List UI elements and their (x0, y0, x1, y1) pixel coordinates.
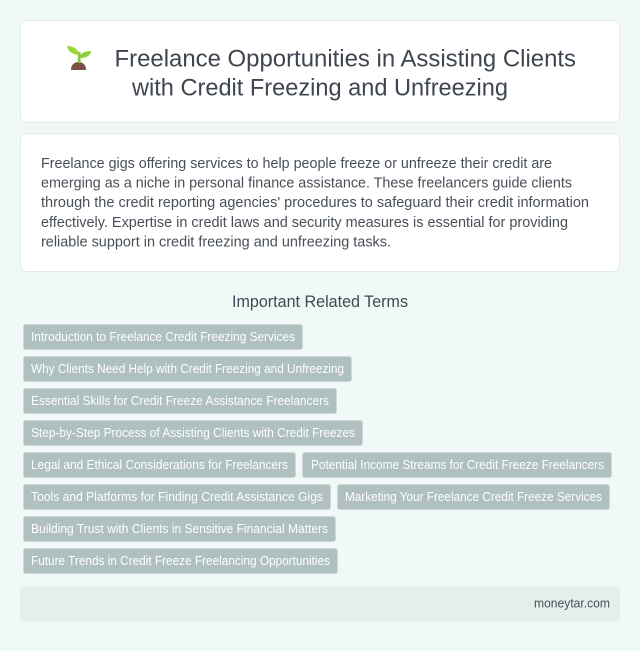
tag: introduction (24, 324, 302, 350)
tag: introduction: Introduction to Freelance Credit Freezing Services (31, 330, 295, 344)
footer (20, 587, 620, 621)
panel: title card (20, 20, 620, 122)
description text: Freelance gigs offering services to help people freeze or unfreeze their credit are (41, 156, 552, 172)
heading: important related terms: Important Related Terms (232, 293, 408, 311)
icon: seedling (67, 46, 91, 70)
description text: through the credit reporting agencies' procedures to safeguard their credit information (41, 195, 589, 211)
title (114, 46, 576, 102)
tag: why clients need help (24, 356, 352, 382)
tag: step-by-step process: Step-by-Step Process of Assisting Clients with Credit Freezes (31, 426, 355, 440)
description text: effectively. Expertise in credit laws and security measures is essential for providing (41, 215, 568, 231)
tag: legal and ethical (24, 452, 296, 478)
tag: marketing (338, 484, 610, 510)
tag: potential income (302, 452, 612, 478)
tag: tools and platforms (24, 484, 330, 510)
panel: description card (20, 134, 620, 272)
tag: future trends: Future Trends in Credit Freeze Freelancing Opportunities (31, 554, 330, 568)
tag: essential skills: Essential Skills for Credit Freeze Assistance Freelancers (31, 394, 329, 408)
title: with Credit Freezing and Unfreezing (131, 74, 508, 102)
panel: related term tags (24, 324, 612, 574)
tag: building trust: Building Trust with Clients in Sensitive Financial Matters (31, 522, 328, 536)
tag: legal and ethical: Legal and Ethical Considerations for Freelancers (31, 458, 288, 472)
footer: moneytar.com (534, 596, 610, 610)
tag: marketing: Marketing Your Freelance Credit Freeze Services (345, 490, 602, 504)
tag: building trust (24, 516, 336, 542)
tag: step-by-step process (24, 420, 362, 446)
tag: future trends (24, 548, 338, 574)
description text: emerging as a niche in personal finance assistance. These freelancers guide clients (41, 176, 572, 192)
description text (41, 156, 589, 250)
tag: potential income: Potential Income Streams for Credit Freeze Freelancers (311, 458, 604, 472)
description text: reliable support in credit freezing and unfreezing tasks. (41, 234, 391, 250)
tag: tools and platforms: Tools and Platforms for Finding Credit Assistance Gigs (31, 490, 323, 504)
tag: essential skills (24, 388, 336, 414)
title: Freelance Opportunities in Assisting Clients (114, 46, 576, 72)
tag: why clients need help: Why Clients Need Help with Credit Freezing and Unfreezing (31, 362, 344, 376)
